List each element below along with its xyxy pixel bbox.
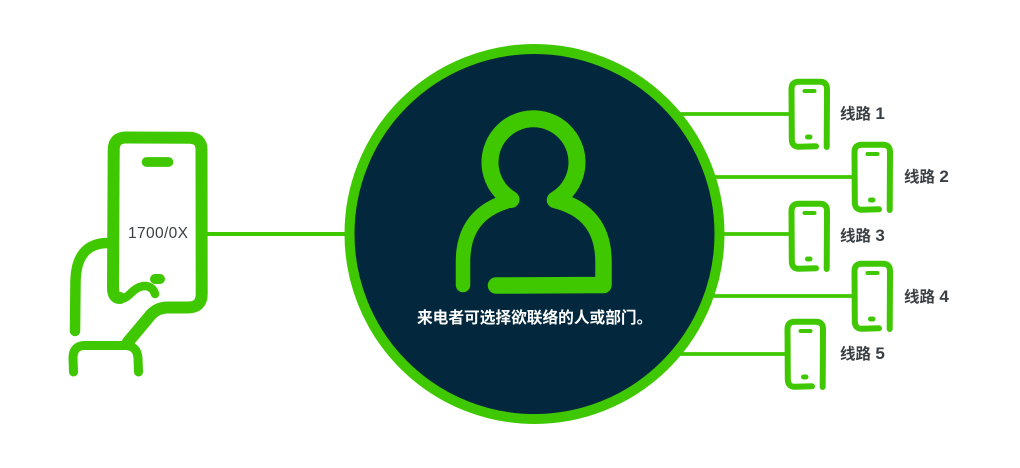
phone finger <box>118 286 155 299</box>
central circle <box>350 49 720 419</box>
person head <box>490 119 577 200</box>
label: line 1: 线路 1 <box>840 104 885 123</box>
connector: line 5 <box>675 352 787 356</box>
connector: caller to menu <box>205 232 350 236</box>
person left shoulder <box>463 200 512 285</box>
icon: hand holding phone <box>73 138 202 372</box>
icon: person <box>463 119 604 286</box>
central caption: 来电者可选择欲联络的人或部门。 <box>417 308 652 327</box>
label: line 5: 线路 5 <box>840 344 885 363</box>
person right shoulder and base <box>496 200 604 286</box>
connector: line 1 <box>675 112 791 116</box>
connector: line 2 <box>710 175 854 179</box>
icon: phone line 4 <box>854 264 890 329</box>
connector: line 4 <box>710 294 854 298</box>
icon: phone line 5 <box>788 322 823 387</box>
phone speaker <box>146 157 168 167</box>
label: line 2: 线路 2 <box>904 167 949 186</box>
cuff <box>73 346 138 372</box>
icon: phone line 1 <box>792 82 827 147</box>
label: line 3: 线路 3 <box>840 226 885 245</box>
connector: line 3 <box>718 232 791 236</box>
icon: phone line 3 <box>792 204 827 269</box>
wrist <box>75 243 108 331</box>
label: line 4: 线路 4 <box>904 287 949 306</box>
phone number: 1700/0X <box>128 225 189 242</box>
phone body <box>113 138 202 342</box>
phone button <box>155 274 160 284</box>
icon: phone line 2 <box>854 145 890 210</box>
